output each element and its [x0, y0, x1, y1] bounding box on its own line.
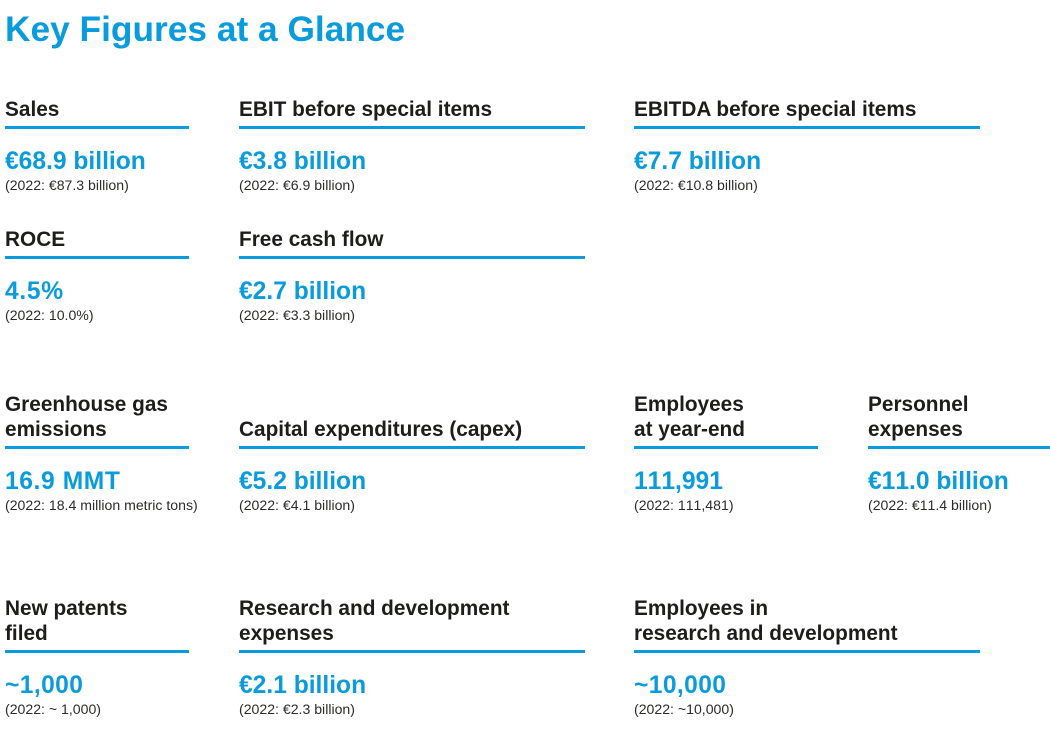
card: Employees at year-end: at year-end [634, 418, 745, 441]
card: EBITDA before special items: €7.7 billion [634, 148, 761, 175]
card: Employees in research and development: (2022: ~10,000) [634, 701, 734, 717]
card: Greenhouse gas emissions: emissions [5, 418, 107, 441]
card: Free cash flow: Free cash flow [239, 228, 383, 251]
card: Research and development expenses: Research and development [239, 597, 509, 620]
card: New patents filed: New patents [5, 597, 128, 620]
card: Sales: €68.9 billion [5, 148, 146, 175]
card: Employees at year-end: (2022: 111,481) [634, 497, 734, 513]
card: Personnel expenses: Personnel [868, 393, 969, 416]
card: EBITDA before special items [634, 98, 980, 193]
card: Employees in research and development: research and development [634, 622, 898, 645]
card: EBITDA before special items: EBITDA before special items [634, 98, 916, 121]
card: New patents filed: filed [5, 622, 48, 645]
card: Free cash flow: €2.7 billion [239, 278, 366, 305]
card: EBIT before special items: (2022: €6.9 billion) [239, 177, 355, 193]
card: ROCE: 4.5% [5, 278, 64, 305]
card: Personnel expenses: €11.0 billion [868, 468, 1009, 495]
card: Sales [5, 98, 189, 193]
title: Key Figures at a Glance [5, 10, 405, 49]
card: EBITDA before special items: (2022: €10.8 billion) [634, 177, 758, 193]
card: Free cash flow: (2022: €3.3 billion) [239, 307, 355, 323]
card: Employees in research and development: Employees in [634, 597, 768, 620]
card: New patents filed [5, 597, 189, 717]
card: Greenhouse gas emissions: 16.9 MMT [5, 468, 120, 495]
card: Personnel expenses: expenses [868, 418, 963, 441]
card: Employees at year-end: Employees [634, 393, 744, 416]
card: Capital expenditures (capex): €5.2 billion [239, 468, 366, 495]
card: EBIT before special items: EBIT before special items [239, 98, 492, 121]
card: Capital expenditures (capex) [239, 418, 585, 513]
card: Research and development expenses: €2.1 billion [239, 672, 366, 699]
card: Employees in research and development: ~10,000 [634, 672, 726, 699]
card: New patents filed: (2022: ~ 1,000) [5, 701, 101, 717]
card: Greenhouse gas emissions: (2022: 18.4 million metric tons) [5, 497, 198, 513]
card: Sales: Sales [5, 98, 59, 121]
card: Greenhouse gas emissions: Greenhouse gas [5, 393, 168, 416]
card: ROCE: (2022: 10.0%) [5, 307, 94, 323]
card: EBIT before special items [239, 98, 585, 193]
card: Free cash flow [239, 228, 585, 323]
card: ROCE: ROCE [5, 228, 65, 251]
card: Employees at year-end: 111,991 [634, 468, 723, 495]
card: EBIT before special items: €3.8 billion [239, 148, 366, 175]
card: Research and development expenses: expenses [239, 622, 334, 645]
card: Capital expenditures (capex): (2022: €4.1 billion) [239, 497, 355, 513]
card: Personnel expenses [868, 393, 1050, 513]
card: Employees at year-end [634, 393, 818, 513]
card: Sales: (2022: €87.3 billion) [5, 177, 129, 193]
card: Research and development expenses [239, 597, 585, 717]
card: Greenhouse gas emissions [5, 393, 198, 513]
card: Capital expenditures (capex): Capital expenditures (capex) [239, 418, 522, 441]
card: New patents filed: ~1,000 [5, 672, 83, 699]
card: ROCE [5, 228, 189, 323]
card: Research and development expenses: (2022: €2.3 billion) [239, 701, 355, 717]
card: Personnel expenses: (2022: €11.4 billion) [868, 497, 992, 513]
card: Employees in research and development [634, 597, 980, 717]
